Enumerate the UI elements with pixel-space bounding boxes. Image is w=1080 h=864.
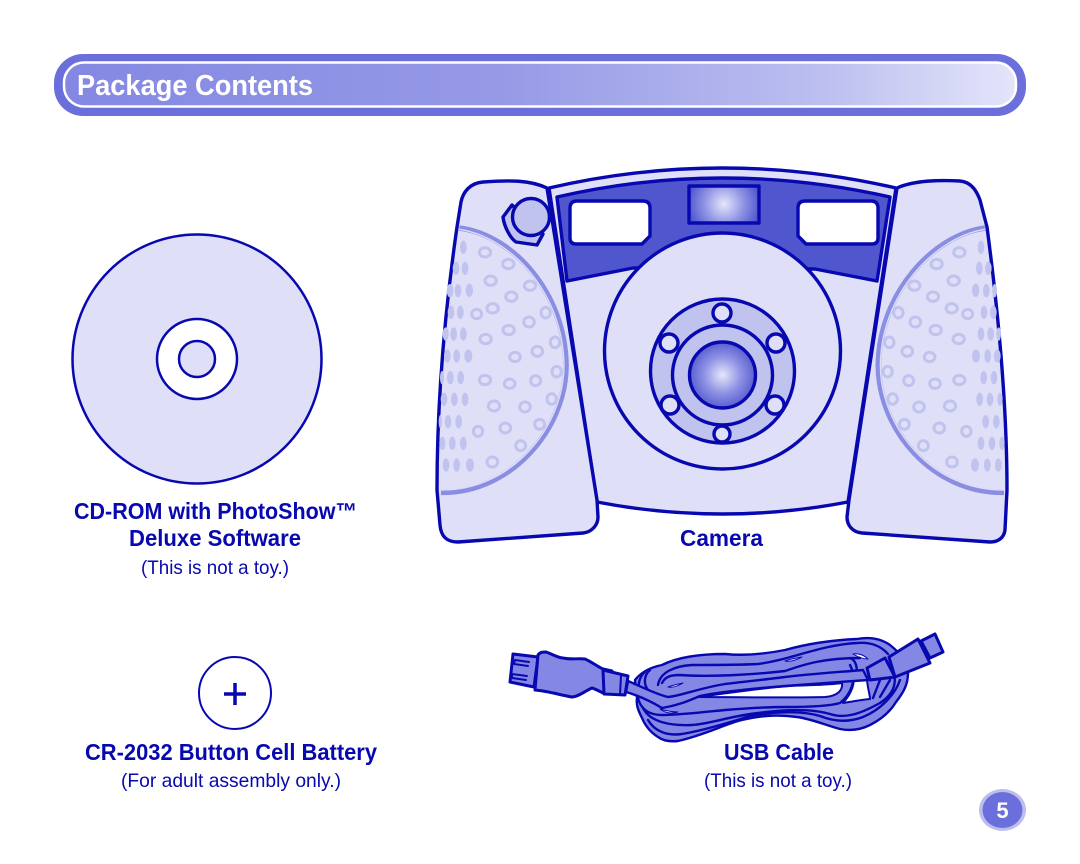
camera body <box>549 168 896 514</box>
right window <box>798 201 878 244</box>
header banner <box>54 54 1026 116</box>
USB cable illustration <box>510 634 943 741</box>
left grip <box>437 181 598 542</box>
icon: CD disc <box>72 234 322 484</box>
battery label: CR-2032 Button Cell Battery <box>85 739 377 765</box>
heading: Package Contents <box>77 70 313 102</box>
lens <box>690 342 756 408</box>
CD-ROM note: (This is not a toy.) <box>141 557 289 579</box>
shutter button <box>503 198 550 245</box>
USB cable label: USB Cable <box>724 739 834 765</box>
viewfinder panel <box>557 178 890 281</box>
panel: battery <box>85 657 377 792</box>
CD-ROM label: CD-ROM with PhotoShow™ <box>74 498 357 524</box>
page number badge: 5 <box>996 798 1009 823</box>
left window <box>570 201 650 244</box>
front cable strand <box>626 670 868 708</box>
right USB plug <box>867 634 943 680</box>
CD-ROM label line two: Deluxe Software <box>129 525 301 551</box>
panel: USB cable <box>510 634 943 792</box>
panel: camera <box>437 168 1007 551</box>
flash <box>689 186 759 223</box>
coil gaps <box>660 654 870 713</box>
lens surround <box>604 233 840 469</box>
panel: CD-ROM <box>72 234 357 579</box>
right grip <box>847 181 1007 542</box>
cable coil silhouette <box>635 638 908 741</box>
camera label: Camera <box>680 525 763 551</box>
lens ring <box>650 299 794 443</box>
right grip speaker <box>878 228 1005 492</box>
left grip speaker <box>439 228 566 492</box>
inner ring <box>672 325 772 425</box>
left USB plug <box>510 652 628 697</box>
camera illustration <box>437 168 1007 542</box>
icon: button cell battery <box>199 657 271 729</box>
USB cable note: (This is not a toy.) <box>704 770 852 792</box>
battery note: (For adult assembly only.) <box>121 770 341 792</box>
lens screws <box>660 304 785 442</box>
coil strands <box>638 643 900 734</box>
page number badge <box>979 789 1026 831</box>
